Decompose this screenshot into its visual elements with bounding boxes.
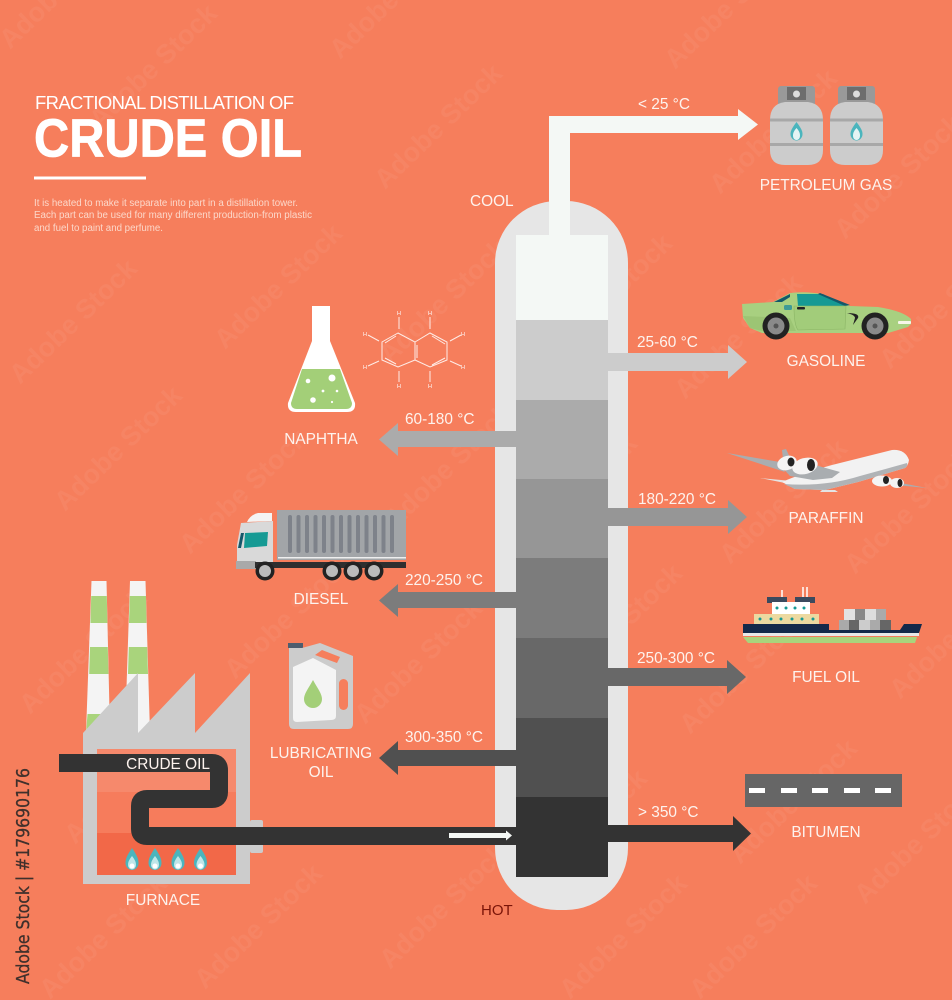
- label: over 350: > 350 °C: [638, 804, 698, 821]
- chimneys: [86, 581, 150, 733]
- arrow: naphtha: [379, 423, 516, 456]
- icon: car: [742, 292, 911, 340]
- text: Adobe Stock: [503, 427, 644, 564]
- text: Adobe Stock: [173, 422, 314, 559]
- tower shell: [495, 201, 628, 910]
- icon: naphthalene molecule: H: [397, 384, 401, 390]
- text: Adobe Stock: [673, 602, 814, 739]
- furnace building: [83, 673, 250, 884]
- text: Adobe Stock: [513, 762, 654, 899]
- furnace chamber: [97, 749, 236, 875]
- text: Adobe Stock: [58, 712, 199, 849]
- label: 250-300: 250-300 °C: [637, 650, 715, 667]
- label: 300-350: 300-350 °C: [405, 729, 483, 746]
- arrow: bitumen: [608, 816, 751, 851]
- icon: cargo ship: [743, 587, 922, 643]
- hull: [743, 624, 922, 633]
- text: Adobe Stock: [713, 432, 854, 569]
- arrow: lubricating oil: [379, 741, 516, 775]
- flames: [126, 848, 207, 870]
- subtitle line: FRACTIONAL DISTILLATION OF: [35, 92, 294, 113]
- text: Adobe Stock: [218, 547, 359, 684]
- label: lubricating oil: [270, 745, 372, 781]
- cargo containers: [839, 609, 891, 630]
- icon: naphthalene molecule: H: [363, 365, 367, 371]
- icon: naphthalene molecule: H: [363, 332, 367, 338]
- label: bitumen: BITUMEN: [791, 824, 861, 841]
- description text: Each part can be used for many different production-from plastic: [34, 210, 312, 221]
- text: Adobe Stock: [368, 57, 509, 194]
- text: Adobe Stock: [378, 397, 519, 534]
- text: Adobe Stock: [348, 592, 489, 729]
- label: petroleum gas: PETROLEUM GAS: [760, 177, 892, 194]
- text: Adobe Stock: [48, 379, 189, 516]
- icon: naphthalene molecule: H: [397, 311, 401, 317]
- description text: [34, 198, 312, 234]
- icon: naphthalene molecule: H: [461, 332, 465, 338]
- text: Adobe Stock: [373, 837, 514, 974]
- label: naphtha: NAPHTHA: [284, 431, 359, 448]
- label: diesel: DIESEL: [294, 591, 349, 608]
- icon: airplane: [727, 449, 927, 492]
- tower layers: [516, 235, 608, 877]
- text: Adobe Stock: [538, 227, 679, 364]
- text: Adobe Stock: [373, 232, 514, 369]
- main heading: CRUDE OIL: [34, 108, 302, 168]
- text: Adobe Stock: [3, 252, 144, 389]
- text: Adobe Stock: [13, 582, 154, 719]
- arrow: petroleum gas: [549, 109, 758, 236]
- description text: It is heated to make it separate into part in a distillation tower.: [34, 198, 298, 209]
- arrow: paraffin: [608, 500, 747, 534]
- title: [34, 92, 302, 168]
- label: hot: HOT: [481, 902, 513, 919]
- crude oil pipe: [59, 763, 516, 836]
- cab: [247, 513, 272, 522]
- label: crude oil: CRUDE OIL: [126, 756, 210, 773]
- icon: naphthalene molecule: [363, 311, 465, 390]
- arrow: diesel: [379, 584, 516, 617]
- text: Adobe Stock: [668, 267, 809, 404]
- description text: and fuel to paint and perfume.: [34, 223, 163, 234]
- label: cool: COOL: [470, 193, 514, 210]
- icon: oil jug: [288, 643, 353, 729]
- flow arrow: [449, 830, 512, 840]
- wheels: [256, 562, 384, 580]
- container: [277, 510, 406, 560]
- icon: gas cylinders: [770, 86, 883, 165]
- text: Adobe Stock: [83, 0, 224, 134]
- text: Adobe Stock: [703, 62, 844, 199]
- text: Adobe Stock: [548, 557, 689, 694]
- arrow: fuel oil: [608, 660, 746, 694]
- label: fuel oil: FUEL OIL: [792, 669, 860, 686]
- label: 220-250: 220-250 °C: [405, 572, 483, 589]
- label: 180-220: 180-220 °C: [638, 491, 716, 508]
- stock id caption: Adobe Stock | #179690176: [14, 768, 34, 984]
- icon: container truck: [236, 510, 406, 580]
- label: 25-60: 25-60 °C: [637, 334, 698, 351]
- label: gasoline: GASOLINE: [787, 353, 865, 370]
- label: under 25: < 25 °C: [638, 96, 690, 113]
- label: 60-180: 60-180 °C: [405, 411, 474, 428]
- furnace: [83, 673, 263, 884]
- icon: flask: [288, 306, 355, 412]
- icon: road: [745, 774, 902, 807]
- icon: naphthalene molecule: H: [428, 311, 432, 317]
- label: lubricating oil: OIL: [309, 764, 334, 781]
- icon: naphthalene molecule: H: [461, 365, 465, 371]
- distillation tower: [495, 201, 628, 910]
- text: Adobe Stock: [188, 857, 329, 994]
- label: paraffin: PARAFFIN: [789, 510, 863, 527]
- arrow: gasoline: [608, 345, 747, 379]
- text: Adobe Stock: [723, 732, 864, 869]
- icon: naphthalene molecule: H: [428, 384, 432, 390]
- text: Adobe Stock: [208, 217, 349, 354]
- ship superstructure: [782, 587, 807, 597]
- label: lubricating oil: LUBRICATING: [270, 745, 372, 762]
- label: furnace: FURNACE: [126, 892, 200, 909]
